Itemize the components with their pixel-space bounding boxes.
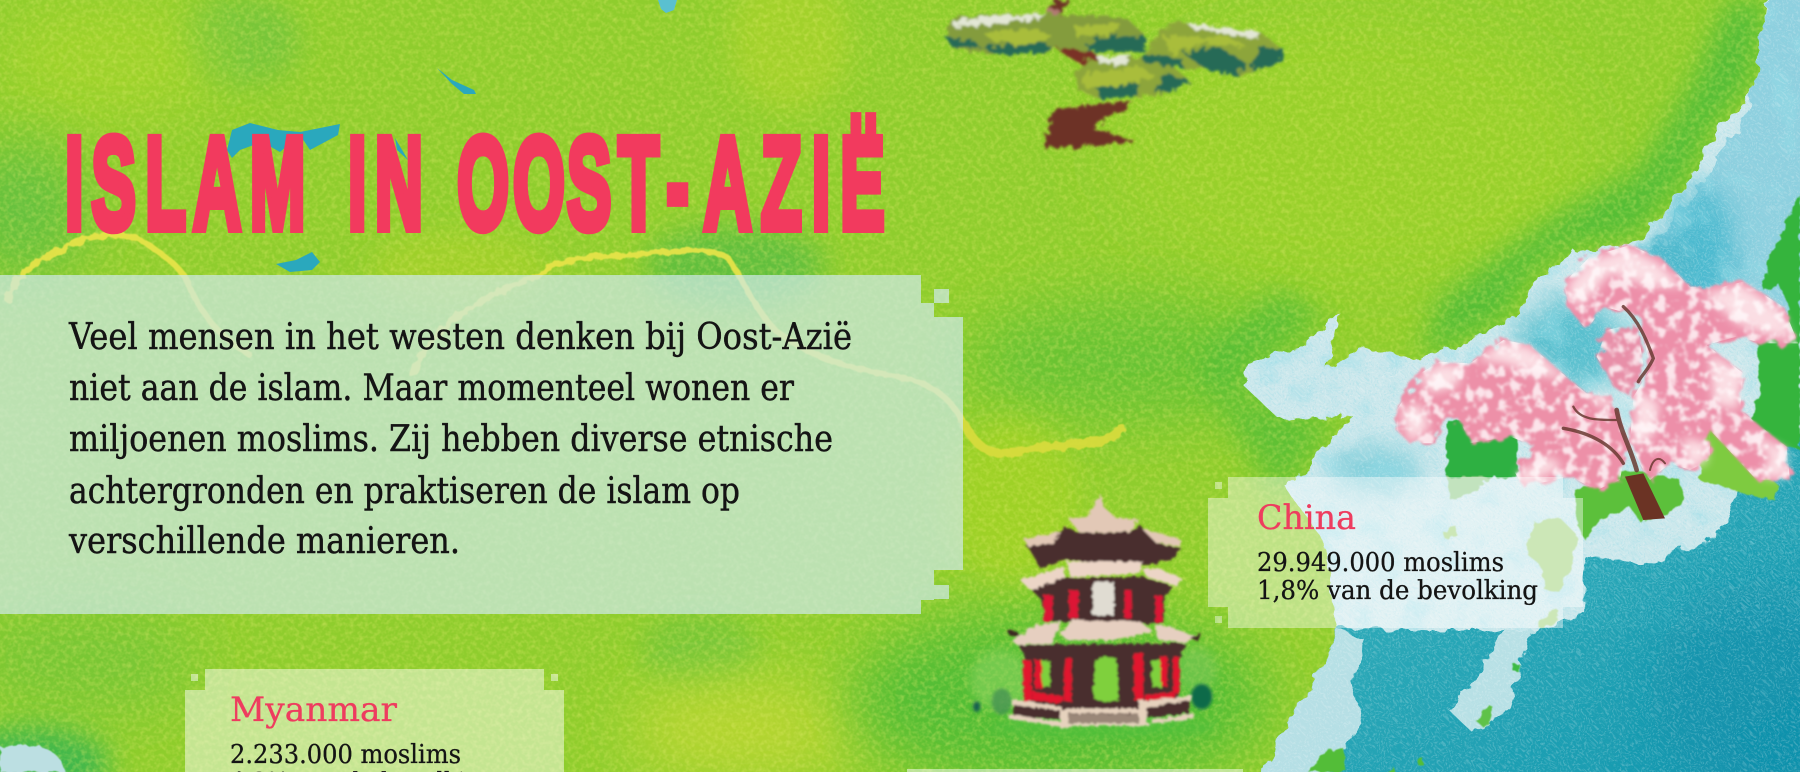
blossom trunk: [1563, 307, 1665, 520]
intro text: miljoenen moslims. Zij hebben diverse etnische: [69, 419, 833, 460]
intro text: verschillende manieren.: [68, 521, 460, 562]
pagoda spire and top roof: [1068, 493, 1138, 533]
Myanmar statistics: 2.233.000 moslims: [230, 740, 461, 770]
China card background: [1208, 477, 1583, 628]
sea: coastline and ocean: [1230, 0, 1800, 772]
China statistics: [1257, 548, 1538, 606]
blossom mass: [1397, 245, 1798, 490]
pagoda lower roof: [1018, 643, 1187, 703]
blossom branches: [1563, 307, 1665, 470]
illustration: cherry blossom tree: [1390, 230, 1800, 530]
coastal patch: lower left sea: [0, 745, 66, 772]
card: China: [1208, 477, 1583, 628]
Myanmar name: Myanmar: [230, 690, 398, 730]
pagoda base and steps: [1013, 700, 1190, 719]
illustration: pagoda shrubs: [970, 647, 1217, 739]
intro text: Veel mensen in het westen denken bij Oost-Azië: [68, 317, 852, 358]
illustration: pagoda: [1006, 493, 1202, 728]
tree branches and trunk: [1043, 0, 1137, 148]
intro text: niet aan de islam. Maar momenteel wonen er: [69, 368, 795, 409]
intro panel background: [0, 275, 963, 614]
blossom highlights: [1400, 248, 1793, 485]
pagoda columns and window: [1044, 590, 1163, 623]
tree foliage: [947, 13, 1284, 98]
rivers: [8, 235, 1121, 453]
China statistics: 29.949.000 moslims: [1257, 548, 1504, 578]
pagoda middle roof: [1030, 577, 1173, 623]
lakes: [227, 0, 677, 272]
intro text: achtergronden en praktiseren de islam op: [69, 471, 740, 512]
pagoda ground floor: [1041, 657, 1162, 702]
China name: China: [1257, 498, 1356, 538]
title: ISLAM IN OOST-AZIË: [65, 111, 885, 257]
Myanmar card background: [185, 669, 564, 772]
intro panel pixel corners: [934, 289, 949, 599]
panel: intro: [0, 275, 963, 614]
illustration: bonsai tree: [947, 0, 1284, 148]
card: cropped lower card: [907, 769, 1243, 772]
islands and peninsulas: [1308, 195, 1800, 772]
blossom mottling: [1396, 246, 1798, 489]
card: Myanmar: [185, 669, 564, 772]
China statistics: 1,8% van de bevolking: [1257, 576, 1538, 606]
intro text: [68, 317, 852, 562]
